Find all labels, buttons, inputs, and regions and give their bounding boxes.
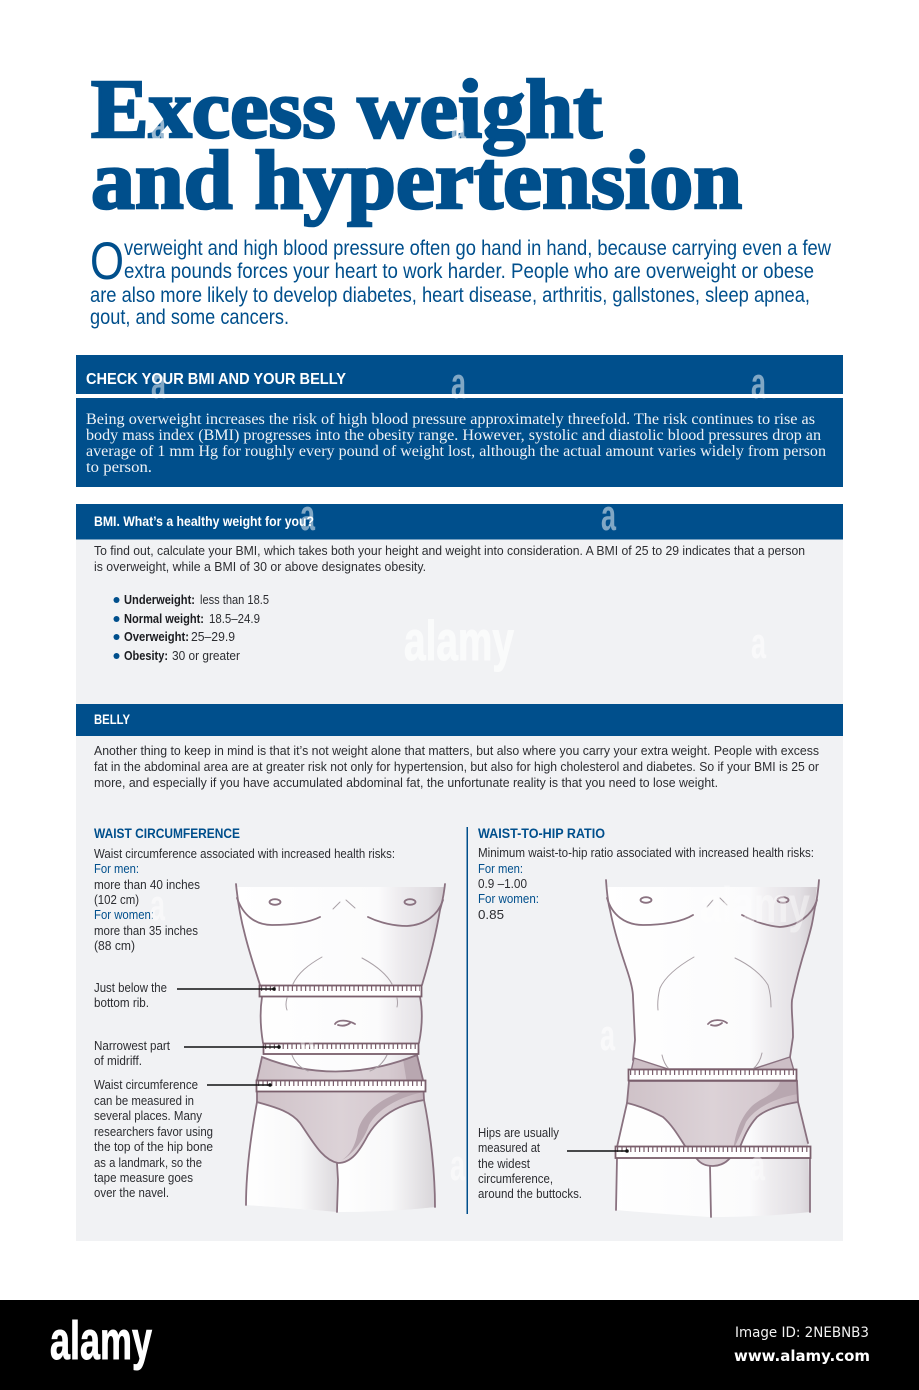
text: belly explanation: fat in the abdominal area are at greater risk not only for hypertension, but also for high cholesterol and diabetes. So if your BMI is 25 or — [94, 759, 820, 774]
panel: BMI introduction: to person. — [86, 459, 152, 476]
label: bottom rib — [94, 980, 167, 1010]
watermark: alamy — [404, 609, 514, 672]
label: midriff: Narrowest part — [94, 1038, 170, 1053]
watermark: a — [150, 881, 165, 930]
text: waist circumference: more than 35 inches — [94, 923, 198, 938]
panel: check your BMI heading: CHECK YOUR BMI AND YOUR BELLY — [86, 371, 347, 388]
intro paragraph: extra pounds forces your heart to work harder. People who are overweight or obese — [124, 259, 814, 283]
label: waist measuring note — [94, 1077, 213, 1200]
watermark: a — [751, 619, 766, 668]
BMI category list: Overweight: — [124, 629, 189, 644]
illustration: waist circumference torso — [236, 884, 445, 1212]
text: waist-to-hip ratio: For men: — [478, 861, 523, 876]
BMI category list: Normal weight: — [124, 611, 204, 626]
footer bar — [0, 1300, 919, 1390]
text: waist circumference: more than 40 inches — [94, 877, 200, 892]
text: waist circumference: For women: — [94, 907, 154, 922]
label: midriff — [94, 1038, 170, 1068]
footer url: www.alamy.com — [734, 1347, 870, 1365]
text: waist circumference: Waist circumference associated with increased health risks: — [94, 846, 395, 861]
intro paragraph — [90, 232, 831, 329]
text: belly explanation: Another thing to keep in mind is that it’s not weight alone that matters, but also where you carry your extra weight. People with excess — [94, 743, 819, 758]
grey content panel — [76, 539, 843, 1241]
panel: BMI introduction: Being overweight increases the risk of high blood pressure approximately threefold. The risk continues to rise as — [86, 411, 815, 428]
watermark: a — [151, 101, 166, 150]
divider — [466, 827, 468, 1214]
illustration: waist-to-hip torso — [606, 880, 819, 1217]
watermark: a — [601, 491, 616, 540]
intro paragraph: are also more likely to develop diabetes, heart disease, arthritis, gallstones, sleep apnea, — [90, 283, 810, 307]
watermark: a — [450, 1141, 465, 1190]
label: waist measuring note: the top of the hip bone — [94, 1139, 213, 1154]
heading: belly: BELLY — [94, 712, 130, 727]
text: waist-to-hip ratio — [478, 826, 814, 922]
text: BMI explanation: To find out, calculate your BMI, which takes both your height and weight into consideration. A BMI of 25 to 29 indicates that a person — [94, 543, 805, 558]
title: and hypertension — [91, 134, 742, 227]
title — [91, 63, 742, 227]
text: waist circumference — [94, 826, 395, 953]
label: waist measuring note: several places. Many — [94, 1108, 202, 1123]
leader line: bottom rib — [177, 987, 276, 991]
footer image id: Image ID: 2NEBNB3 — [735, 1325, 869, 1341]
text: waist circumference: (88 cm) — [94, 938, 135, 953]
watermark — [150, 101, 810, 1190]
label: hips: the widest — [478, 1156, 530, 1171]
panel: check your BMI heading — [76, 355, 843, 394]
label: hips — [478, 1125, 582, 1201]
watermark: a — [451, 101, 466, 150]
heading: belly — [76, 704, 843, 736]
BMI category list: 25–29.9 — [191, 629, 235, 644]
text: waist-to-hip ratio: Minimum waist-to-hip ratio associated with increased health risks: — [478, 845, 814, 860]
label: waist measuring note: Waist circumference — [94, 1077, 198, 1092]
text: waist circumference: WAIST CIRCUMFERENCE — [94, 826, 240, 841]
intro paragraph: O — [90, 232, 124, 291]
heading: BMI healthy weight — [76, 504, 843, 540]
watermark: a — [600, 1011, 615, 1060]
label: bottom rib: Just below the — [94, 980, 167, 995]
watermark: a — [151, 359, 166, 408]
label: waist measuring note: can be measured in — [94, 1093, 194, 1108]
watermark: a — [300, 491, 315, 540]
leader line: hips — [567, 1149, 629, 1153]
text: waist-to-hip ratio: 0.85 — [478, 907, 504, 922]
label: bottom rib: bottom rib. — [94, 995, 149, 1010]
BMI category list — [114, 592, 269, 663]
text: waist circumference: (102 cm) — [94, 892, 139, 907]
BMI category list: Obesity: — [124, 648, 168, 663]
leader line: hip bone — [207, 1083, 272, 1087]
label: hips: Hips are usually — [478, 1125, 559, 1140]
panel: BMI introduction: body mass index (BMI) progresses into the obesity range. However, systolic and diastolic blood pressures drop an — [86, 427, 821, 444]
text: belly explanation — [94, 743, 820, 790]
watermark: a — [751, 359, 766, 408]
BMI category list: less than 18.5 — [200, 592, 269, 607]
label: hips: circumference, — [478, 1171, 553, 1186]
text: waist-to-hip ratio: WAIST-TO-HIP RATIO — [478, 826, 605, 841]
title: Excess weight — [91, 63, 602, 156]
BMI category list: Underweight: — [124, 592, 195, 607]
text: waist-to-hip ratio: For women: — [478, 891, 539, 906]
label: waist measuring note: as a landmark, so the — [94, 1155, 202, 1170]
panel: BMI introduction — [76, 398, 843, 487]
heading: BMI healthy weight: BMI. What’s a healthy weight for you? — [94, 514, 314, 529]
label: waist measuring note: tape measure goes — [94, 1170, 193, 1185]
text: waist-to-hip ratio: 0.9 –1.00 — [478, 876, 527, 891]
label: midriff: of midriff. — [94, 1053, 142, 1068]
panel: BMI introduction: average of 1 mm Hg for roughly every pound of weight lost, although the actual amount varies widely from person — [86, 443, 826, 460]
BMI category list: 30 or greater — [172, 648, 241, 663]
watermark: a — [750, 1141, 765, 1190]
watermark: a — [300, 1011, 315, 1060]
text: BMI explanation: is overweight, while a BMI of 30 or above designates obesity. — [94, 559, 426, 574]
intro paragraph: gout, and some cancers. — [90, 305, 289, 329]
BMI category list: 18.5–24.9 — [209, 611, 260, 626]
leader line: midriff — [184, 1045, 281, 1049]
watermark: alamy — [700, 877, 810, 933]
text: belly explanation: more, and especially if you have accumulated abdominal fat, the unfortunate reality is that you need to lose weight. — [94, 775, 718, 790]
text: BMI explanation — [94, 543, 805, 574]
label: hips: around the buttocks. — [478, 1186, 582, 1201]
watermark: a — [451, 359, 466, 408]
label: waist measuring note: researchers favor using — [94, 1124, 213, 1139]
label: hips: measured at — [478, 1140, 540, 1155]
text: waist circumference: For men: — [94, 861, 139, 876]
label: waist measuring note: over the navel. — [94, 1185, 169, 1200]
footer logo: alamy — [50, 1311, 152, 1371]
